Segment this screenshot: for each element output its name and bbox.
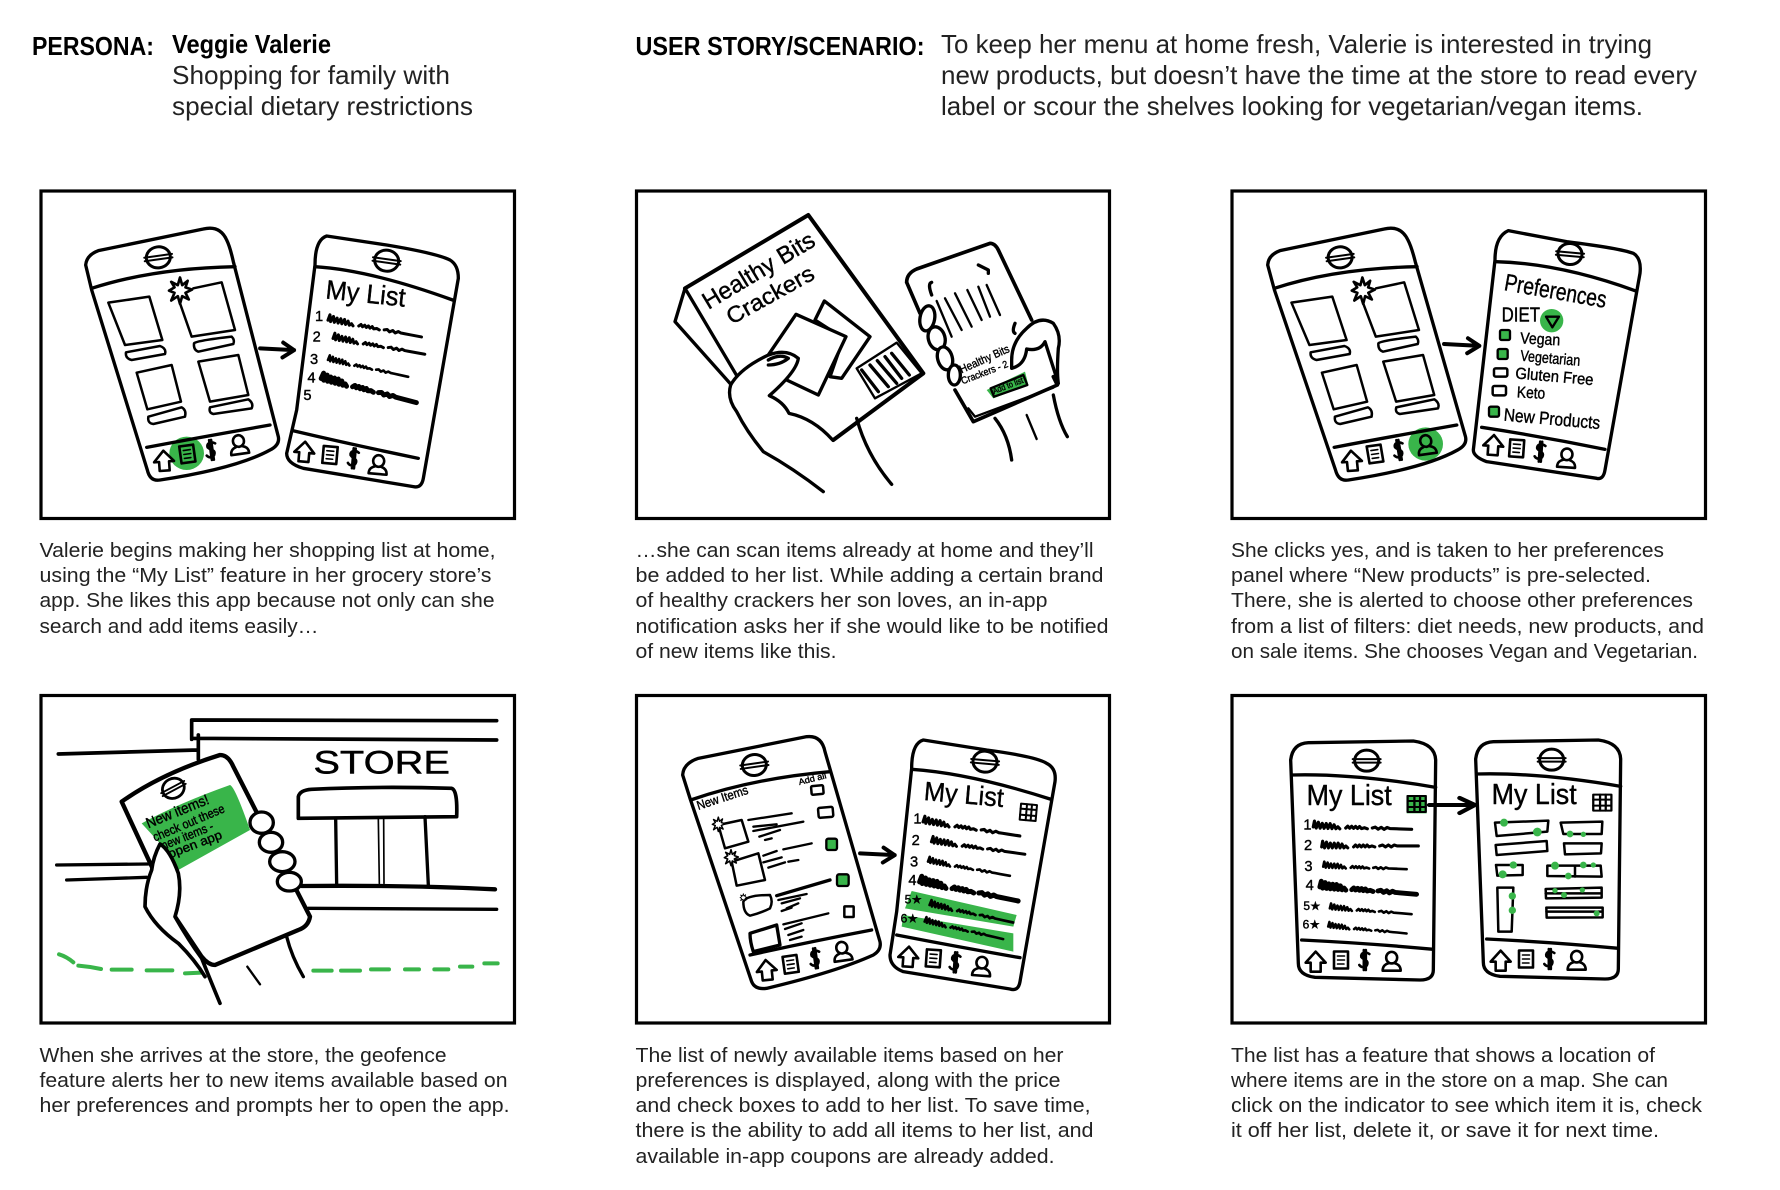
arrow [860,846,895,863]
store sign: STORE [313,744,450,780]
caption 2: …she can scan items already at home and they’ll [636,539,1094,562]
phone: my list with map button: 4 [1306,878,1314,894]
panel 5 sketch [683,737,1055,990]
caption 6: click on the indicator to see which item it is, check [1231,1094,1703,1117]
panel 2 sketch [675,215,1067,492]
phone: my list with map button: 5★ [1303,899,1321,913]
caption 5 [636,1044,1094,1168]
caption 5: The list of newly available items based on her [636,1044,1064,1067]
phone: my list with new items [890,740,1055,990]
phone: my list with new items: 3 [910,855,918,871]
caption 4 [40,1044,510,1117]
phone: preferences [1473,231,1640,479]
panel frame [41,191,514,518]
phone: barcode scanner [907,243,1057,422]
caption 3: She clicks yes, and is taken to her preferences [1231,539,1664,562]
panel frame [636,191,1110,518]
phone: preferences: New Products [1503,405,1601,433]
caption 1: app. She likes this app because not only can she [40,589,494,612]
caption 3 [1231,539,1704,663]
phone: preferences: Keto [1516,384,1546,403]
caption 6 [1230,1044,1703,1142]
hand holding box [730,352,892,492]
persona name and description [172,29,473,121]
phone: preferences: Gluten Free [1515,365,1594,389]
caption 5: available in-app coupons are already added. [636,1145,1054,1168]
caption 1: using the “My List” feature in her grocery store’s [40,564,492,587]
phone with notification: new items - [159,819,215,853]
cracker box: Healthy Bits [698,227,820,315]
cracker box [675,215,923,440]
persona name and description: special dietary restrictions [172,91,473,121]
phone: my list with map button: 3 [1304,859,1312,875]
persona label: PERSONA: [32,31,154,61]
phone: my list with map button: 2 [1304,838,1312,854]
phone: barcode scanner: Add to list [991,375,1025,396]
caption 2: of healthy crackers her son loves, an in-app [636,589,1048,612]
header: user story [636,29,1697,121]
phone: preferences: Vegetarian [1520,348,1581,370]
phone: my list: 5 [303,388,311,404]
phone: my list: 3 [310,352,318,368]
caption 2: notification asks her if she would like to be notified [636,615,1108,638]
caption 6: it off her list, delete it, or save it for next time. [1231,1119,1659,1142]
panel 6 sketch [1291,740,1621,980]
hand holding phone [145,812,303,1003]
caption 1: search and add items easily… [40,615,318,638]
phone: my list with new items: 1 [913,811,921,827]
phone: my list: 4 [307,370,315,386]
caption 2: of new items like this. [636,640,836,663]
user story text: To keep her menu at home fresh, Valerie is interested in trying [941,29,1652,59]
phone with notification: open app [166,828,224,861]
phone: my list: My List [324,274,408,313]
user story label: USER STORY/SCENARIO: [636,31,924,61]
arrow [260,341,295,358]
panel 1: making a list [41,191,514,518]
panel frame [1232,696,1706,1023]
user story text [941,29,1697,121]
caption 4: her preferences and prompts her to open the app. [40,1094,510,1117]
caption 3: panel where “New products” is pre-selected. [1231,564,1651,587]
phone: preferences: DIET [1502,305,1540,327]
caption 4: When she arrives at the store, the geofence [40,1044,447,1067]
phone: barcode scanner: Healthy Bits [958,343,1012,376]
geofence dashed line [59,954,498,973]
phone with notification: check out these [151,802,227,844]
phone: my list with new items: 5★ [905,892,922,906]
phone: my list with new items: 6★ [901,911,918,925]
hand holding phone [995,320,1067,460]
panel frame [41,696,514,1023]
caption 6: where items are in the store on a map. She can [1230,1069,1668,1092]
phone: my list with new items: My List [923,776,1006,813]
panel 4: store geofence [41,696,514,1023]
user story text: label or scour the shelves looking for vegetarian/vegan items. [941,91,1643,121]
persona name and description: Shopping for family with [172,60,450,90]
persona name and description: Veggie Valerie [172,29,331,59]
panel 3 sketch [1267,228,1640,480]
panel 3: preferences [1232,191,1706,518]
caption 3: from a list of filters: diet needs, new products, and [1231,615,1704,638]
map shelves [1495,821,1603,932]
panel frame [1232,191,1706,518]
cracker box: Crackers [721,260,819,329]
phone: my list: 2 [313,330,321,346]
caption 5: preferences is displayed, along with the price [636,1069,1060,1092]
phone: barcode scanner: Crackers - 2 [960,359,1010,387]
arrow [1429,798,1475,813]
caption 3: There, she is alerted to choose other preferences [1231,589,1693,612]
phone: new items [683,737,880,989]
panel 1 sketch [86,228,458,487]
phone: my list with map button: 6★ [1303,917,1320,931]
highlight: list nav icon [169,437,204,470]
phone: my list [287,236,458,487]
phone: home screen [1267,228,1467,480]
phone: my list with map button: 1 [1303,817,1311,833]
phone: preferences: Vegan [1520,330,1561,349]
caption 1: Valerie begins making her shopping list at home, [40,539,496,562]
panel 4 sketch [57,720,498,1003]
panel frame [636,696,1110,1023]
map location dots [1499,819,1600,916]
caption 6: The list has a feature that shows a location of [1231,1044,1655,1067]
phone: my list with new items: 4 [908,873,916,889]
panel 6: store map [1232,696,1706,1023]
highlight: profile nav icon [1408,427,1443,461]
phone: preferences: Preferences [1502,269,1609,314]
phone: home screen [86,228,279,480]
phone with notification: New items! [144,792,212,832]
phone: store map [1476,740,1621,979]
caption 2 [636,539,1108,663]
phone: new items: New Items [695,783,750,813]
phone: my list: 1 [315,309,323,325]
caption 4: feature alerts her to new items available based on [40,1069,507,1092]
user story text: new products, but doesn’t have the time at the store to read every [941,60,1697,90]
phone: new items: Add all [797,770,827,787]
header: persona [32,29,473,121]
phone: my list with map button [1291,741,1436,980]
caption 2: be added to her list. While adding a certain brand [636,564,1104,587]
phone: my list with new items: 2 [912,833,920,849]
phone with notification [122,755,310,965]
store building [57,720,497,909]
caption 3: on sale items. She chooses Vegan and Vegetarian. [1231,640,1698,663]
caption 5: there is the ability to add all items to her list, and [636,1119,1094,1142]
arrow [1444,337,1480,354]
caption 1 [40,539,496,638]
panel 2: scanning crackers [636,191,1110,518]
panel 5: new items list [636,696,1110,1023]
caption 5: and check boxes to add to her list. To save time, [636,1094,1090,1117]
